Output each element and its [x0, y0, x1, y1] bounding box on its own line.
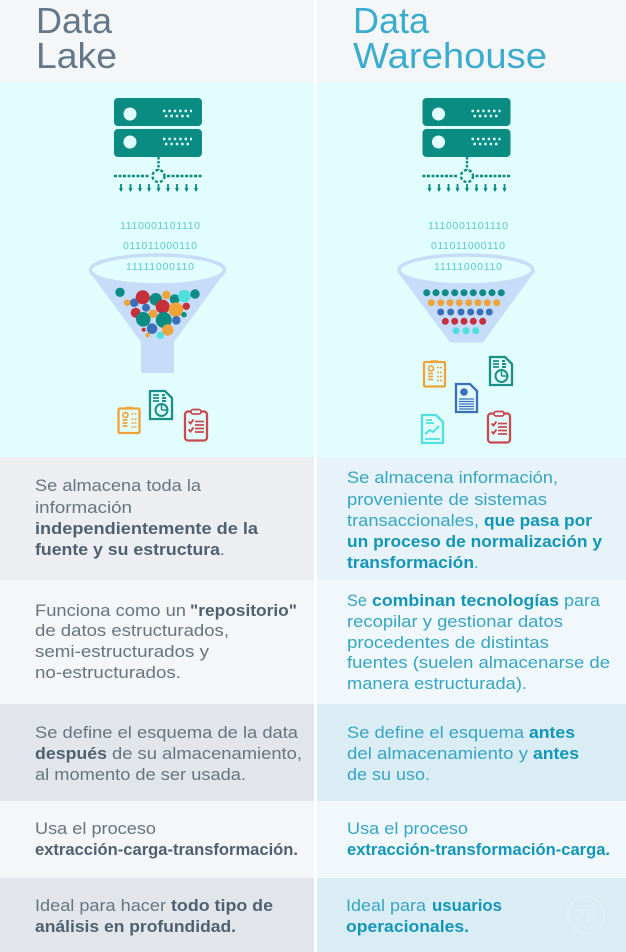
panel: data lake header [0, 0, 314, 83]
icon: watermark logo [568, 896, 604, 934]
icon: orange clipboard [118, 408, 140, 433]
panel: row 3 right: del almacenamiento y [347, 744, 529, 763]
icon: blue document [456, 384, 477, 412]
panel: row 2 right: Se [347, 591, 367, 610]
panel: row 2 right: procedentes de distintas [347, 633, 549, 652]
binary data text: 1110001101110 [428, 220, 508, 232]
icon: funnel with ordered data [397, 255, 535, 342]
panel: row 2 right: combinan tecnologías [372, 591, 559, 610]
panel: data lake header: Data [36, 0, 113, 41]
panel: row 5 right [317, 878, 626, 952]
panel: data warehouse header: Data [353, 0, 430, 41]
panel: row 1 left: información [35, 498, 132, 517]
panel: data warehouse illustration [317, 83, 626, 457]
panel: row 2 right [317, 580, 626, 704]
panel: row 4 left [0, 801, 314, 878]
panel: row 2 left: no-estructurados. [35, 663, 181, 682]
icon: server with network [422, 98, 510, 192]
icon: funnel with ordered data: 11111000110 [434, 261, 502, 273]
panel: row 5 left: todo tipo de [171, 896, 273, 915]
icon: funnel with unordered data: 11111000110 [126, 261, 194, 273]
panel: row 3 right [317, 704, 626, 801]
binary data text [120, 220, 200, 252]
panel: row 1 right: proveniente de sistemas [347, 490, 547, 509]
panel: row 3 left: de su almacenamiento, [112, 744, 302, 763]
panel: row 5 left: Ideal para hacer [35, 896, 166, 915]
icon: red checklist [185, 410, 207, 440]
panel: row 2 left: "repositorio" [190, 601, 297, 620]
panel: row 4 right [317, 801, 626, 878]
panel: row 1 right: Se almacena información, [347, 468, 558, 487]
panel: row 3 right: antes [533, 744, 579, 763]
panel: row 1 left: independientemente de la [35, 519, 259, 538]
panel: data lake header: Lake [36, 35, 117, 76]
icon: orange clipboard [424, 362, 445, 386]
panel: row 1 left: Se almacena toda la [35, 476, 202, 495]
panel: row 3 left: Se define el esquema de la data [35, 723, 299, 742]
icon: teal report [150, 391, 172, 419]
panel: data warehouse header [317, 0, 626, 83]
panel: row 3 left: después [35, 744, 107, 763]
panel: row 3 left [0, 704, 314, 801]
panel: row 5 left [0, 878, 314, 952]
panel: row 5 right: usuarios [432, 896, 502, 915]
icon: watermark logo: 7P [575, 905, 597, 927]
panel: row 4 left: extracción-carga-transformación. [35, 840, 298, 859]
panel: row 1 right [317, 457, 626, 580]
panel: row 2 left: semi-estructurados y [35, 642, 210, 661]
panel: row 2 right: recopilar y gestionar datos [347, 612, 563, 631]
panel: row 4 right: extracción-transformación-carga. [347, 840, 610, 859]
panel: row 5 right: Ideal para [346, 896, 427, 915]
binary data text [428, 220, 508, 252]
panel: row 2 left: Funciona como un [35, 601, 186, 620]
icon: cyan chart document [422, 415, 443, 443]
panel: data warehouse header: Warehouse [353, 35, 547, 76]
panel: row 3 right: Se define el esquema [347, 723, 525, 742]
panel: row 1 right: transformación [347, 553, 474, 572]
icon: server with network [114, 98, 202, 192]
binary data text: 011011000110 [123, 240, 197, 252]
panel: row 1 right: un proceso de normalización y [347, 532, 603, 551]
panel: row 3 left: al momento de ser usada. [35, 765, 246, 784]
binary data text: 1110001101110 [120, 220, 200, 232]
panel: row 2 right: fuentes (suelen almacenarse de [347, 653, 610, 672]
panel: row 2 right: manera estructurada). [347, 674, 527, 693]
panel: row 1 left: fuente y su estructura [35, 540, 221, 559]
panel: row 1 left: . [220, 540, 225, 559]
icon: teal report [490, 357, 512, 385]
binary data text: 011011000110 [431, 240, 505, 252]
panel: row 2 left: de datos estructurados, [35, 621, 229, 640]
panel: row 3 right: antes [529, 723, 575, 742]
panel: row 1 left [0, 457, 314, 580]
panel: row 1 right: que pasa por [484, 511, 592, 530]
panel: row 2 left [0, 580, 314, 704]
panel: row 4 left: Usa el proceso [35, 819, 156, 838]
icon: red checklist [488, 412, 510, 442]
panel: row 5 right: operacionales. [346, 917, 469, 936]
panel: row 1 right: . [474, 553, 479, 572]
panel: row 5 left: análisis en profundidad. [35, 917, 236, 936]
panel: data lake illustration [0, 83, 314, 457]
panel: row 3 right: de su uso. [347, 765, 430, 784]
panel: row 2 right: para [564, 591, 601, 610]
icon: funnel with unordered data [89, 255, 226, 373]
panel: row 4 right: Usa el proceso [347, 819, 468, 838]
panel: row 1 right: transaccionales, [347, 511, 479, 530]
